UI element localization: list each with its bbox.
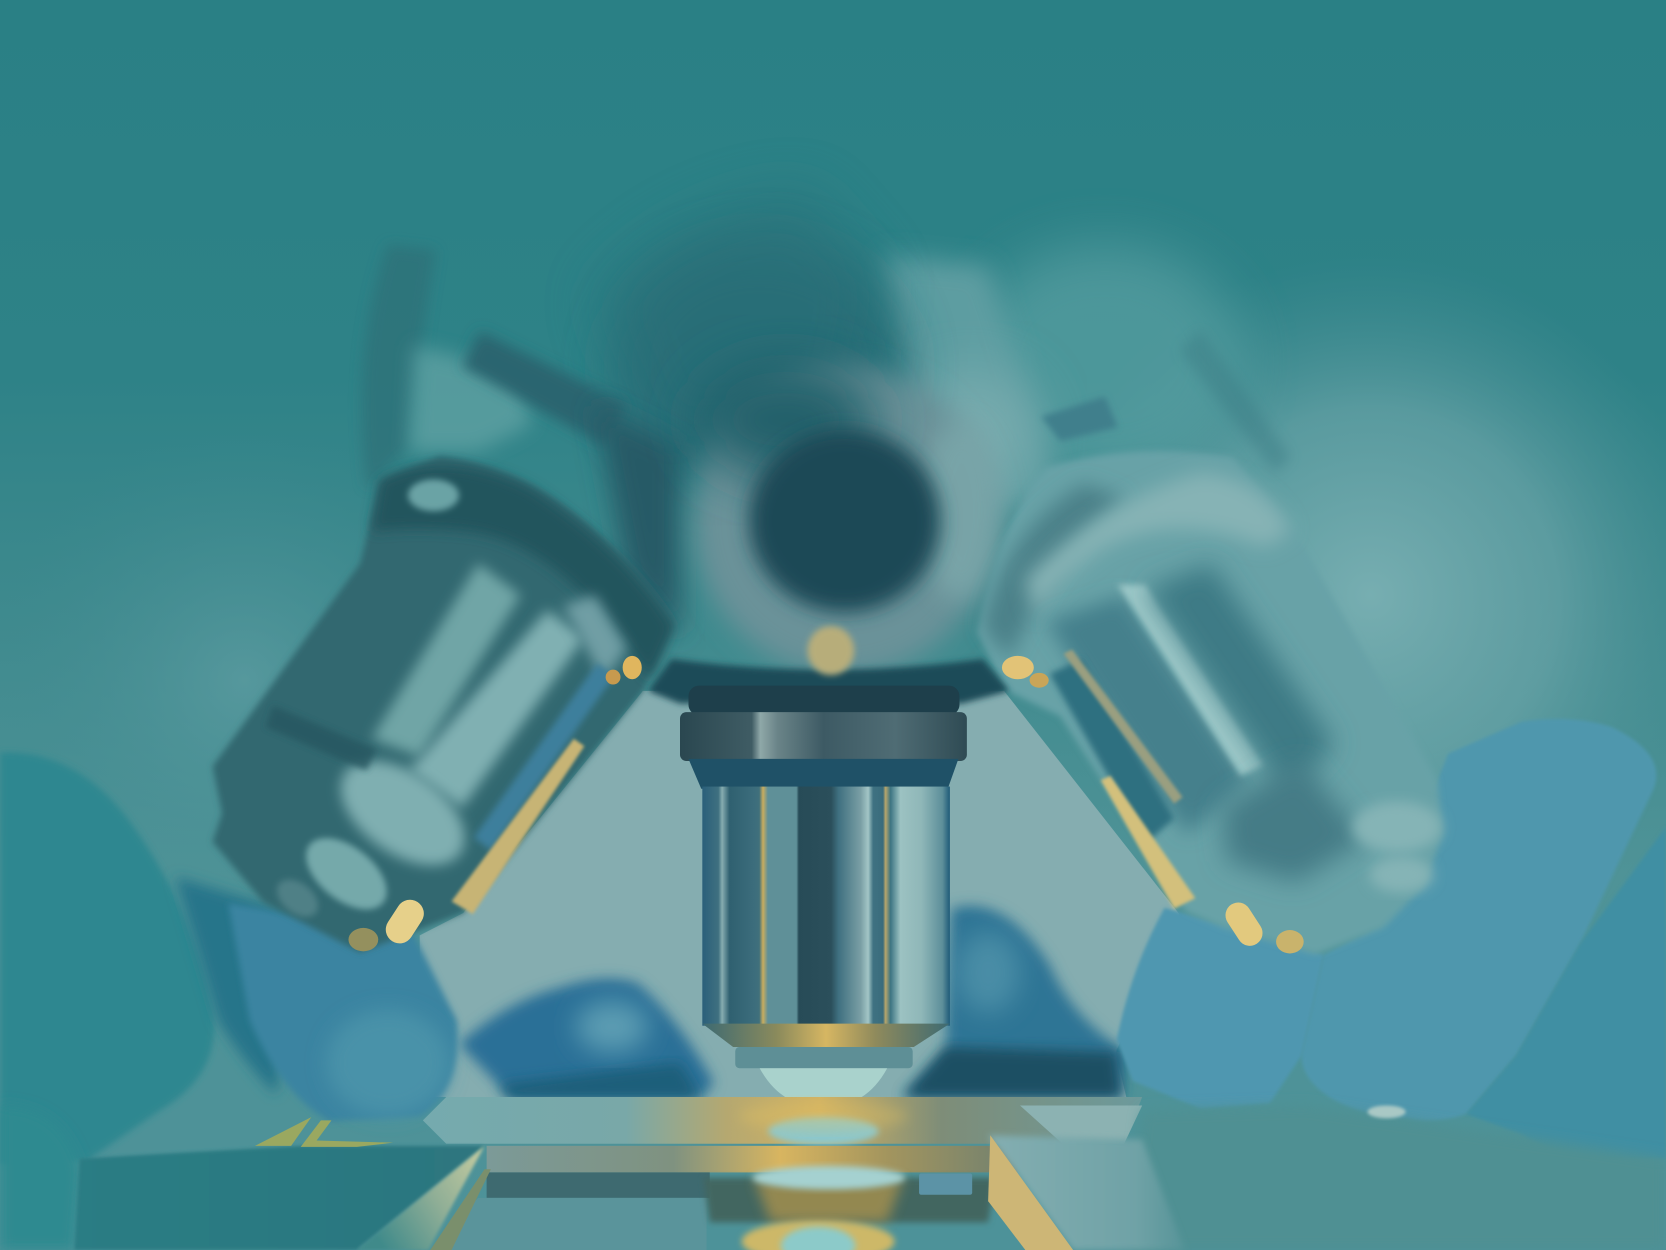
blurred operator head behind the microscope bbox=[362, 191, 1291, 638]
left glove hand bbox=[0, 752, 214, 1250]
left stage plate bbox=[74, 1117, 491, 1250]
lens glow bbox=[738, 1101, 908, 1131]
eyepiece: dark circular opening bbox=[694, 361, 1004, 675]
turret shadow above central objective bbox=[648, 626, 1009, 704]
left finger bbox=[175, 877, 458, 1121]
right finger and glove bbox=[1117, 719, 1666, 1159]
microscope stage and glass slide bbox=[423, 1097, 1142, 1250]
back glove blobs bbox=[459, 906, 1128, 1099]
right stage plate bbox=[988, 1105, 1666, 1250]
bright backdrop between objectives bbox=[420, 691, 1179, 1097]
right objective lens bbox=[978, 451, 1443, 955]
left objective lens bbox=[212, 456, 674, 952]
central objective lens bbox=[680, 686, 967, 1108]
